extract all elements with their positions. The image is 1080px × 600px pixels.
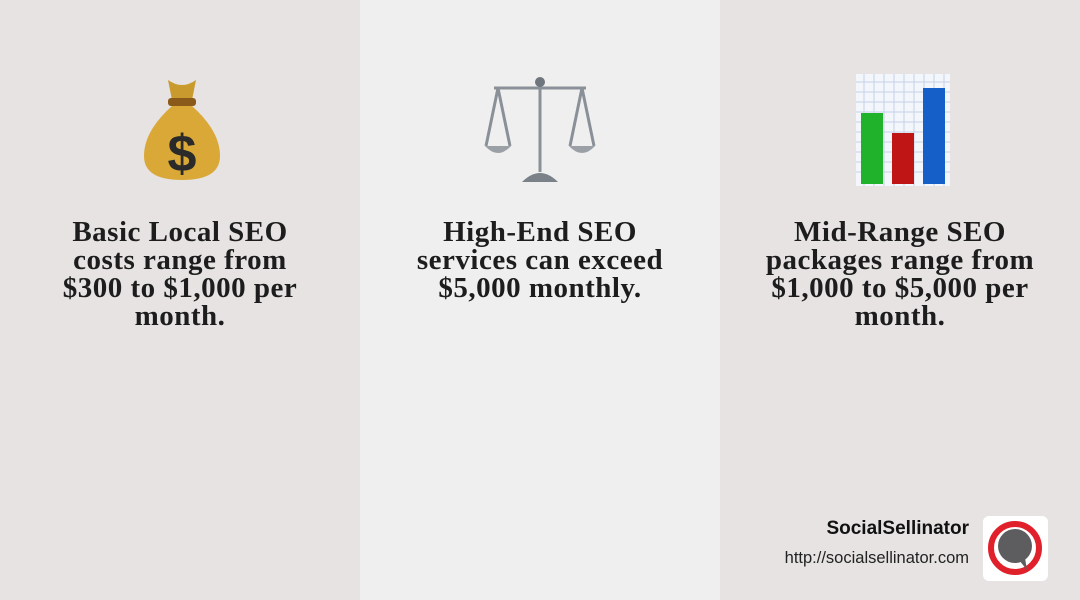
brand name: SocialSellinator	[826, 518, 969, 539]
icon: money bag: $	[168, 125, 197, 182]
text: basic: Basic Local SEO	[72, 216, 288, 248]
panel: basic	[0, 0, 360, 600]
text: basic: costs range from	[73, 244, 287, 276]
text: high-end: High-End SEO	[443, 216, 637, 248]
panel: high-end	[360, 0, 720, 600]
text: basic	[63, 216, 297, 332]
text: mid-range: $1,000 to $5,000 per	[771, 272, 1029, 304]
icon: scales	[484, 77, 596, 182]
brand block	[785, 516, 1048, 581]
icon: money bag	[144, 80, 220, 182]
text: mid-range: Mid-Range SEO	[794, 216, 1006, 248]
text: high-end: services can exceed	[417, 244, 663, 276]
brand url: http://socialsellinator.com	[785, 549, 969, 567]
text: basic: $300 to $1,000 per	[63, 272, 297, 304]
logo	[983, 516, 1048, 581]
text: mid-range	[766, 216, 1034, 332]
text: mid-range: packages range from	[766, 244, 1034, 276]
text: basic: month.	[135, 300, 225, 332]
text: mid-range: month.	[855, 300, 945, 332]
icon: bar chart	[856, 74, 950, 186]
text: high-end	[417, 216, 663, 304]
panel: mid-range	[720, 0, 1080, 600]
text: high-end: $5,000 monthly.	[438, 272, 642, 304]
